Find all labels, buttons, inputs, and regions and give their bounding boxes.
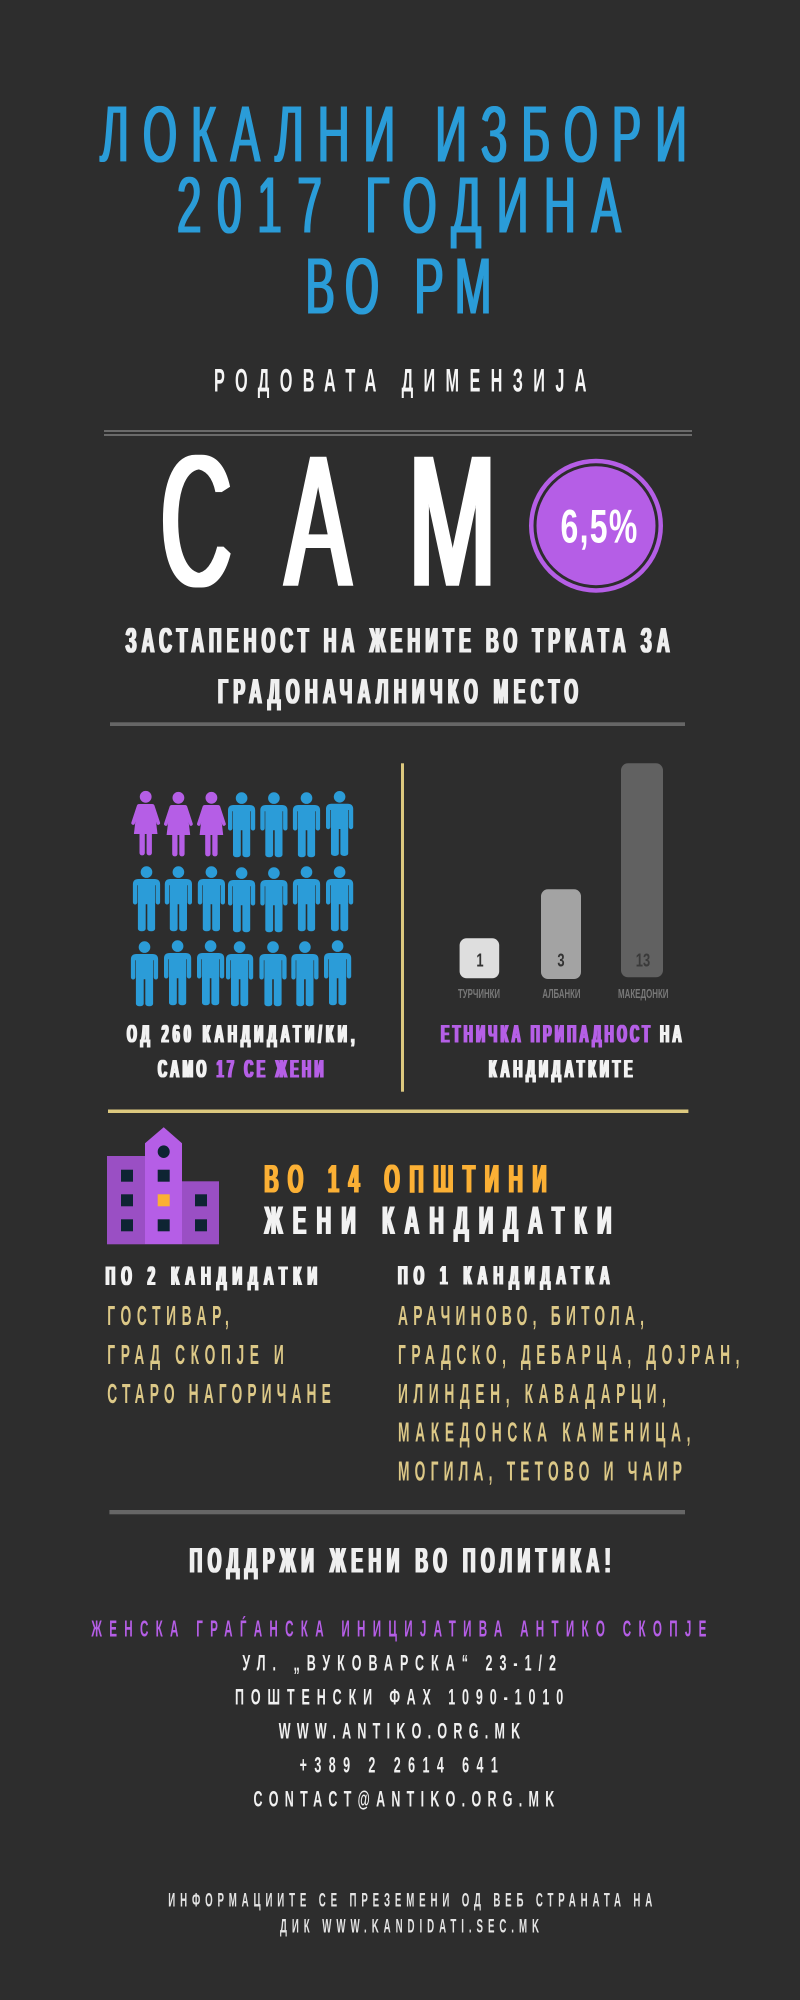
list: two candidates: ГРАД СКОПЈЕ И	[107, 1339, 284, 1370]
address and contact lines: +389 2 2614 641	[300, 1753, 498, 1778]
icon: municipal building	[107, 1127, 219, 1244]
heading: 14 municipalities: ВО 14 ОПШТИНИ	[264, 1156, 547, 1202]
list: one candidate: МАКЕДОНСКА КАМЕНИЦА,	[398, 1416, 690, 1448]
bar labels	[458, 988, 668, 1002]
title: ВО РМ	[306, 241, 491, 331]
list: two candidates: ПО 2 КАНДИДАТКИ	[106, 1262, 317, 1291]
address and contact lines	[235, 1651, 563, 1812]
heading: 14 municipalities	[264, 1156, 612, 1243]
list: one candidate: ПО 1 КАНДИДАТКА	[398, 1262, 610, 1291]
list: one candidate: АРАЧИНОВО, БИТОЛА,	[398, 1300, 644, 1331]
title: ЛОКАЛНИ ИЗБОРИ	[100, 89, 687, 179]
big word: САМО	[161, 416, 496, 626]
caption: ethnicity: ЕТНИЧКА ПРИПАДНОСТ НА	[441, 1021, 682, 1049]
big word: САМО: А	[286, 416, 351, 626]
pictogram: 3 women among 21 people	[131, 791, 353, 1006]
title	[100, 89, 687, 331]
organisation name: ЖЕНСКА ГРАЃАНСКА ИНИЦИЈАТИВА АНТИКО СКОПЈЕ	[91, 1615, 706, 1642]
bar: Turkish, 1: 1	[476, 952, 484, 971]
source note: ДИК WWW.KANDIDATI.SEC.MK	[280, 1916, 539, 1937]
list: one candidate: ИЛИНДЕН, КАВАДАРЦИ,	[398, 1378, 666, 1409]
title: 2017 ГОДИНА	[177, 160, 621, 250]
address and contact lines: ПОШТЕНСКИ ФАХ 1090-1010	[235, 1685, 563, 1709]
subtitle: РОДОВАТА ДИМЕНЗИЈА	[214, 364, 587, 399]
percentage badge: 6,5%: 6,5%	[560, 500, 637, 553]
bar: Macedonian, 13	[621, 763, 663, 977]
bar: Albanian, 3	[541, 889, 581, 979]
bar: Albanian, 3: 3	[557, 952, 565, 971]
list: one candidate: ГРАДСКО, ДЕБАРЦА, ДОЈРАН,	[398, 1339, 739, 1370]
bar labels: МАКЕДОНКИ	[618, 988, 668, 1002]
caption: candidates count: ОД 260 КАНДИДАТИ/КИ,	[127, 1021, 355, 1049]
big word: САМО: С	[161, 416, 231, 626]
call to action: ПОДДРЖИ ЖЕНИ ВО ПОЛИТИКА!	[190, 1541, 611, 1580]
caption: ethnicity	[441, 1021, 682, 1084]
address and contact lines: УЛ. „ВУКОВАРСКА“ 23-1/2	[242, 1651, 556, 1675]
caption: ethnicity: КАНДИДАТКИТЕ	[489, 1056, 632, 1084]
double rule	[104, 430, 692, 436]
headline: representation of women: ГРАДОНАЧАЛНИЧКО МЕСТО	[218, 672, 578, 711]
address and contact lines: WWW.ANTIKO.ORG.MK	[279, 1719, 520, 1743]
source note	[168, 1890, 652, 1937]
heading: 14 municipalities: ЖЕНИ КАНДИДАТКИ	[264, 1197, 611, 1243]
list: one candidate	[398, 1262, 740, 1487]
big word: САМО: М	[409, 417, 496, 626]
bar chart: ethnicity of women candidates	[458, 763, 668, 1002]
contact block	[91, 1615, 706, 1812]
caption: candidates count: САМО 17 СЕ ЖЕНИ	[158, 1056, 324, 1084]
source note: ИНФОРМАЦИИТЕ СЕ ПРЕЗЕМЕНИ ОД ВЕБ СТРАНАТА НА	[168, 1890, 652, 1912]
headline: representation of women	[126, 621, 670, 711]
bar: Macedonian, 13: 13	[636, 952, 650, 971]
list: two candidates: ГОСТИВАР,	[107, 1300, 229, 1331]
caption: candidates count	[127, 1021, 354, 1084]
list: two candidates: СТАРО НАГОРИЧАНЕ	[107, 1378, 331, 1409]
list: two candidates	[106, 1262, 331, 1409]
list: one candidate: МОГИЛА, ТЕТОВО И ЧАИР	[398, 1455, 682, 1487]
address and contact lines: CONTACT@ANTIKO.ORG.MK	[254, 1787, 554, 1812]
bar labels: АЛБАНКИ	[542, 988, 580, 1002]
bar labels: ТУРЧИНКИ	[458, 988, 500, 1002]
percentage badge: 6,5%	[529, 459, 663, 593]
bar: Turkish, 1	[460, 938, 499, 978]
headline: representation of women: ЗАСТАПЕНОСТ НА ЖЕНИТЕ ВО ТРКАТА ЗА	[126, 621, 670, 660]
